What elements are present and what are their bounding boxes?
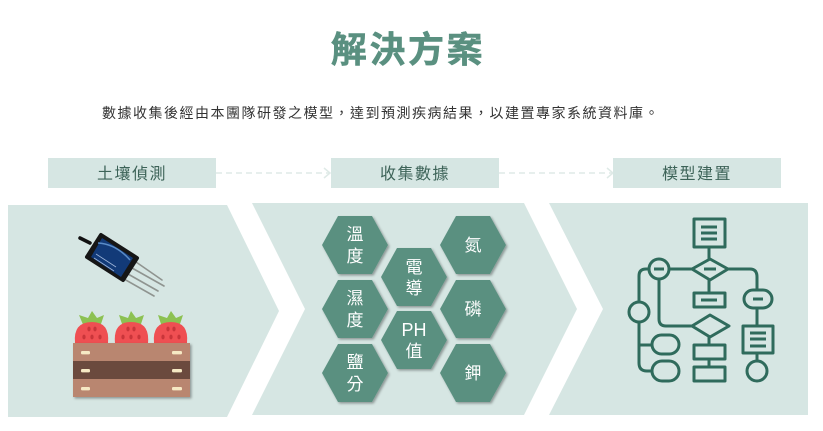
description text: 數據收集後經由本團隊研發之模型，達到預測疾病結果，以建置專家系統資料庫。 — [102, 105, 660, 121]
icon: soil sensor — [80, 235, 164, 296]
title: 解決方案 — [331, 29, 485, 70]
heading: soil sensing: 土壤偵測 — [97, 164, 167, 183]
arrow: step one to two — [216, 168, 330, 178]
hexagon: humidity — [322, 280, 388, 338]
icon: strawberries in a crate — [73, 311, 190, 397]
heading: model building — [613, 158, 781, 188]
hexagon: salinity: 分 — [346, 375, 364, 394]
hexagon: nitrogen — [440, 216, 506, 274]
heading: model building: 模型建置 — [662, 165, 732, 183]
panel: data collection — [252, 203, 577, 415]
hexagon: temperature: 度 — [346, 247, 364, 266]
hexagon: pH: PH — [401, 320, 427, 340]
hexagon: temperature: 溫 — [346, 225, 364, 244]
heading: data collection — [331, 158, 499, 188]
hexagon: potassium: 鉀 — [464, 364, 482, 383]
hexagon: humidity: 濕 — [346, 289, 364, 308]
hexagon: pH — [381, 311, 447, 369]
heading: soil sensing — [48, 158, 216, 188]
hexagon: conductivity — [381, 248, 447, 306]
hexagon: phosphorus: 磷 — [464, 300, 482, 319]
hexagon: phosphorus — [440, 280, 506, 338]
hexagon: salinity — [322, 344, 388, 402]
panel: soil sensing — [8, 205, 279, 417]
hexagon: conductivity: 導 — [406, 279, 422, 298]
hexagon: potassium — [440, 344, 506, 402]
hexagon: nitrogen: 氮 — [464, 236, 482, 255]
arrow: step two to three — [499, 168, 613, 178]
heading: data collection: 收集數據 — [380, 165, 450, 183]
hexagon: conductivity: 電 — [406, 258, 422, 277]
icon: flowchart — [629, 219, 773, 381]
hexagon: salinity: 鹽 — [346, 353, 364, 372]
hexagon: pH: 值 — [406, 342, 422, 361]
hexagon: temperature — [322, 216, 388, 274]
hexagon: humidity: 度 — [346, 311, 364, 330]
panel: model building — [549, 203, 808, 415]
